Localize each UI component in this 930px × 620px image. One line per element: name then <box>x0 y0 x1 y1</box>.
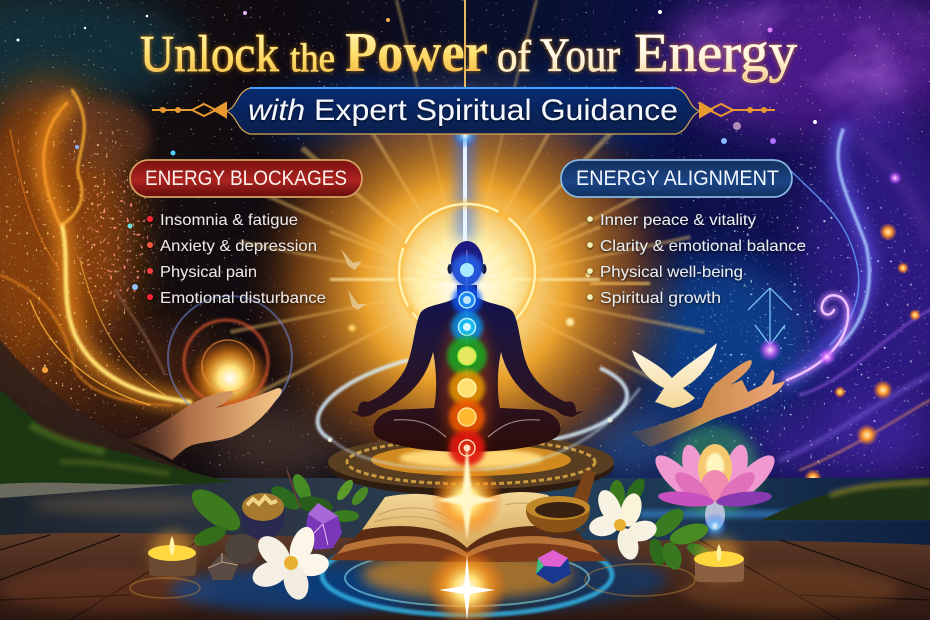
badge: energy alignment: ENERGY ALIGNMENT <box>576 167 779 190</box>
badge: energy blockages: ENERGY BLOCKAGES <box>145 167 347 190</box>
left energy orb <box>168 296 292 420</box>
main title: Power <box>345 22 488 84</box>
vertical light beam <box>451 0 479 245</box>
list: blockage symptoms: Physical pain <box>160 264 257 281</box>
lake and far shore <box>0 340 930 545</box>
glowing orbs on the right <box>721 122 921 487</box>
chakra: yellow <box>449 370 485 406</box>
right reaching hand <box>630 360 785 447</box>
chakra: orange <box>449 399 485 435</box>
left plumeria flower <box>249 523 331 602</box>
main title: Energy <box>634 22 798 83</box>
badge: energy alignment <box>561 160 792 197</box>
list: alignment benefits: Physical well-being <box>600 264 743 281</box>
dove <box>632 343 717 408</box>
chakra: throat blue <box>452 285 482 315</box>
purple crystal <box>305 503 342 550</box>
leaves right cluster <box>609 476 713 572</box>
sacred geometry triangle <box>748 288 792 362</box>
central golden glow and rays <box>230 0 705 510</box>
list: blockage symptoms: Emotional disturbance <box>160 290 326 307</box>
list: blockage symptoms <box>147 212 326 307</box>
left open hand <box>125 388 282 460</box>
panel: energy blockages <box>130 160 362 307</box>
subtitle text: with Expert Spiritual Guidance <box>248 94 678 127</box>
panel: energy alignment <box>561 160 806 307</box>
brown rock cluster <box>208 493 285 580</box>
main title: Unlock <box>140 26 279 83</box>
candle left <box>148 531 196 576</box>
chakra points <box>447 254 487 466</box>
wooden floor <box>0 533 930 620</box>
right plumeria flower <box>587 486 659 562</box>
main title: Your <box>540 29 620 82</box>
left flame swirl <box>0 90 190 405</box>
right blue and purple swirls <box>780 130 930 470</box>
chakra: root red <box>449 430 485 466</box>
list: alignment benefits: Spiritual growth <box>600 290 721 307</box>
list: blockage symptoms: Anxiety & depression <box>160 238 317 255</box>
lower light flare <box>427 548 507 620</box>
candle right <box>694 536 744 582</box>
main title <box>140 22 798 84</box>
chakra: cyan <box>451 311 483 343</box>
plaque ornament right <box>700 103 775 117</box>
list: alignment benefits: Inner peace & vitality <box>600 212 756 229</box>
main title: of <box>497 32 531 81</box>
list: alignment benefits <box>587 212 806 307</box>
cosmic background <box>0 0 930 478</box>
sparkle stars <box>16 10 817 442</box>
rear energy ring <box>318 360 627 440</box>
moths in the glow <box>341 249 366 310</box>
chakra: crown eye <box>451 254 483 286</box>
singing bowl and mallet <box>526 470 596 538</box>
meditation disc <box>328 435 614 496</box>
chakra: heart green <box>447 336 487 376</box>
blue energy ripple <box>130 535 695 615</box>
list: alignment benefits: Clarity & emotional balance <box>600 238 806 255</box>
badge: energy blockages <box>130 160 362 197</box>
gem stone <box>536 550 571 584</box>
open book <box>330 445 607 562</box>
golden halo ring <box>399 204 535 340</box>
lotus flower <box>649 425 781 539</box>
subtitle plaque <box>226 88 700 134</box>
plaque ornament left <box>152 103 226 117</box>
silhouette figure <box>350 241 584 460</box>
front energy ring <box>332 388 640 470</box>
main title: the <box>290 35 335 80</box>
list: blockage symptoms: Insomnia & fatigue <box>160 212 298 229</box>
leaves left cluster <box>185 470 371 550</box>
